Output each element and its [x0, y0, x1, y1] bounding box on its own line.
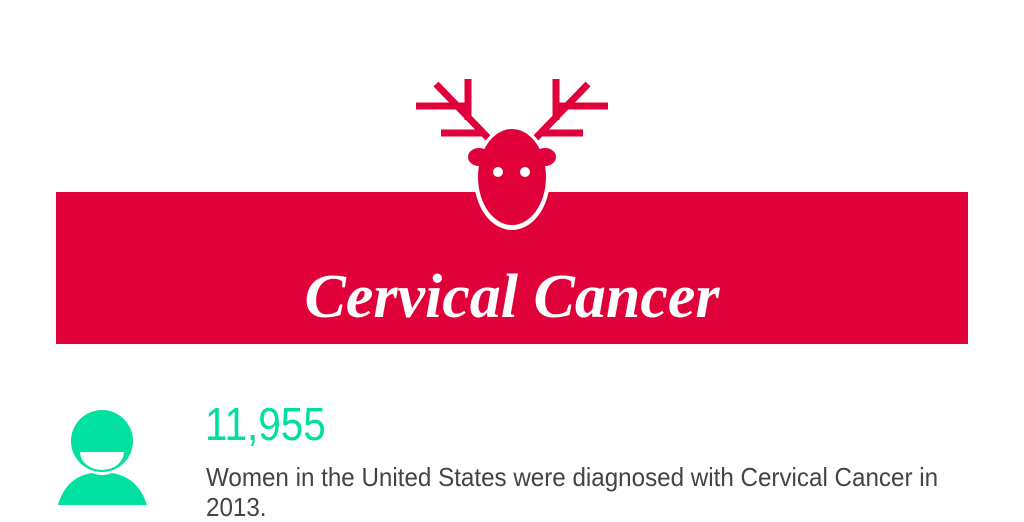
banner	[56, 192, 968, 344]
stat number: 11,955	[205, 398, 326, 450]
icon: person	[58, 410, 147, 505]
title: Cervical Cancer	[304, 263, 720, 331]
stat description: Women in the United States were diagnosed with Cervical Cancer in 2013.	[206, 462, 938, 522]
icon: reindeer	[416, 79, 608, 230]
